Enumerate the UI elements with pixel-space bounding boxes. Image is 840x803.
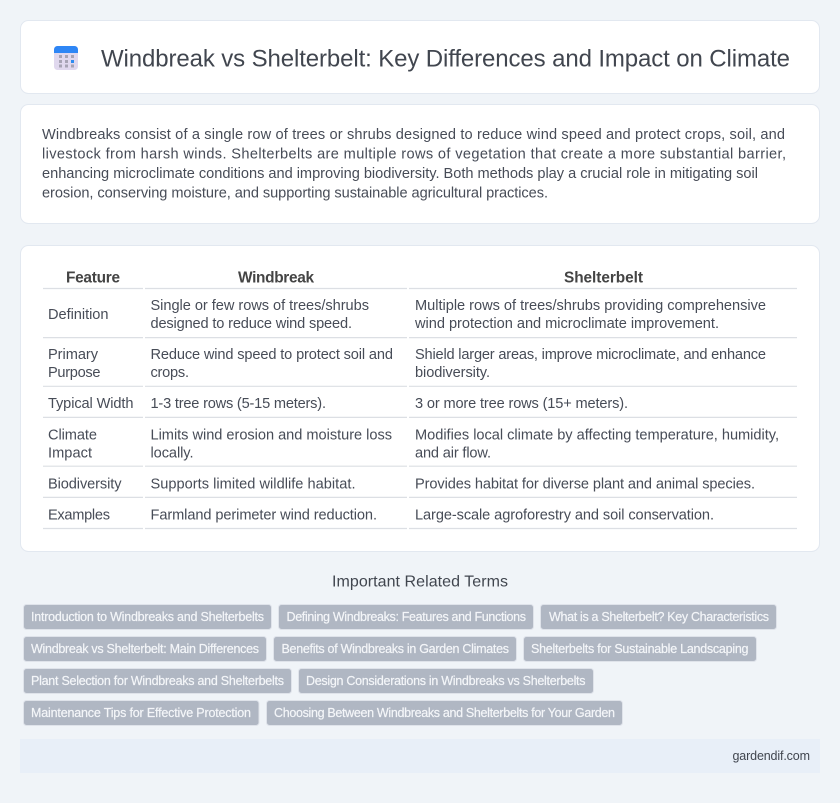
row: climate impact: Climate xyxy=(48,427,97,443)
panel: comparison table xyxy=(20,246,820,552)
tag row 3: Design Considerations in Windbreaks vs Shelterbelts xyxy=(306,674,586,688)
row: examples xyxy=(48,507,714,523)
row: primary purpose: Reduce wind speed to protect soil and xyxy=(150,347,393,363)
row: primary purpose: biodiversity. xyxy=(415,365,490,381)
tag row 3 xyxy=(24,668,594,694)
row: definition: designed to reduce wind speed. xyxy=(150,316,352,332)
row: examples: Large-scale agroforestry and soil conservation. xyxy=(415,507,714,523)
tag row 2: Shelterbelts for Sustainable Landscaping xyxy=(531,642,749,656)
related term tags xyxy=(24,604,776,726)
row: typical width xyxy=(48,396,628,412)
footer band xyxy=(20,739,820,773)
tag row 1 xyxy=(24,604,776,630)
row: definition: Multiple rows of trees/shrubs providing comprehensive xyxy=(415,298,766,314)
panel: introduction xyxy=(20,104,820,224)
intro paragraph: erosion, conserving moisture, and supporting sustainable agricultural practices. xyxy=(42,186,548,202)
row: biodiversity: Biodiversity xyxy=(48,476,122,492)
intro paragraph: Windbreaks consist of a single row of trees or shrubs designed to reduce wind speed and protect crops, soil, and xyxy=(42,127,785,143)
tag row 1: Introduction to Windbreaks and Shelterbelts xyxy=(31,610,264,624)
row: typical width: 1-3 tree rows (5-15 meters). xyxy=(150,396,326,412)
row: primary purpose: Shield larger areas, improve microclimate, and enhance xyxy=(415,347,766,363)
row: definition: wind protection and microclimate improvement. xyxy=(414,316,719,332)
icon: calendar xyxy=(54,46,78,70)
row: biodiversity: Supports limited wildlife habitat. xyxy=(150,476,356,492)
row: definition: Definition xyxy=(48,307,108,323)
tag row 4: Choosing Between Windbreaks and Shelterbelts for Your Garden xyxy=(274,706,615,720)
row: climate impact: and air flow. xyxy=(415,445,491,461)
row: primary purpose: Primary xyxy=(48,347,99,363)
tag row 1: What is a Shelterbelt? Key Characteristics xyxy=(549,610,769,624)
row: definition: Single or few rows of trees/shrubs xyxy=(150,298,369,314)
row: biodiversity: Provides habitat for diverse plant and animal species. xyxy=(415,476,755,492)
tag row 2: Benefits of Windbreaks in Garden Climates xyxy=(282,642,509,656)
row: climate impact: Modifies local climate by affecting temperature, humidity, xyxy=(415,427,779,443)
row: definition xyxy=(48,298,766,332)
row: climate impact: locally. xyxy=(150,445,194,461)
tag row 2: Windbreak vs Shelterbelt: Main Differences xyxy=(31,642,259,656)
table header: Windbreak xyxy=(238,270,314,287)
table header: Feature xyxy=(66,270,120,287)
header panel xyxy=(20,20,820,94)
tag row 4 xyxy=(24,700,622,726)
intro paragraph xyxy=(42,127,786,202)
row: examples: Farmland perimeter wind reduction. xyxy=(150,507,377,523)
intro paragraph: livestock from harsh winds. Shelterbelts are multiple rows of vegetation that create a more substantial barrier, xyxy=(42,146,786,162)
row: examples: Examples xyxy=(48,507,110,523)
title: Windbreak vs Shelterbelt: Key Differences and Impact on Climate xyxy=(101,46,790,73)
table grid lines xyxy=(43,288,797,528)
row: climate impact: Limits wind erosion and moisture loss xyxy=(150,427,392,443)
row: climate impact: Impact xyxy=(48,445,92,461)
row: primary purpose xyxy=(48,347,766,381)
row: primary purpose: Purpose xyxy=(48,365,100,381)
footer source: gardendif.com xyxy=(732,749,810,763)
row: biodiversity xyxy=(48,476,755,492)
intro paragraph: enhancing microclimate conditions and improving biodiversity. Both methods play a crucial role in mitigating soil xyxy=(42,166,758,182)
table header xyxy=(66,270,643,287)
row: typical width: 3 or more tree rows (15+ meters). xyxy=(415,396,628,412)
heading: important related terms: Important Related Terms xyxy=(332,574,508,591)
tag row 3: Plant Selection for Windbreaks and Shelterbelts xyxy=(31,674,284,688)
tag row 4: Maintenance Tips for Effective Protection xyxy=(31,706,251,720)
row: climate impact xyxy=(48,427,779,461)
row: typical width: Typical Width xyxy=(48,396,134,412)
row: primary purpose: crops. xyxy=(150,365,189,381)
tag row 2 xyxy=(24,636,756,662)
tag row 1: Defining Windbreaks: Features and Functions xyxy=(286,610,526,624)
table header: Shelterbelt xyxy=(564,270,643,287)
